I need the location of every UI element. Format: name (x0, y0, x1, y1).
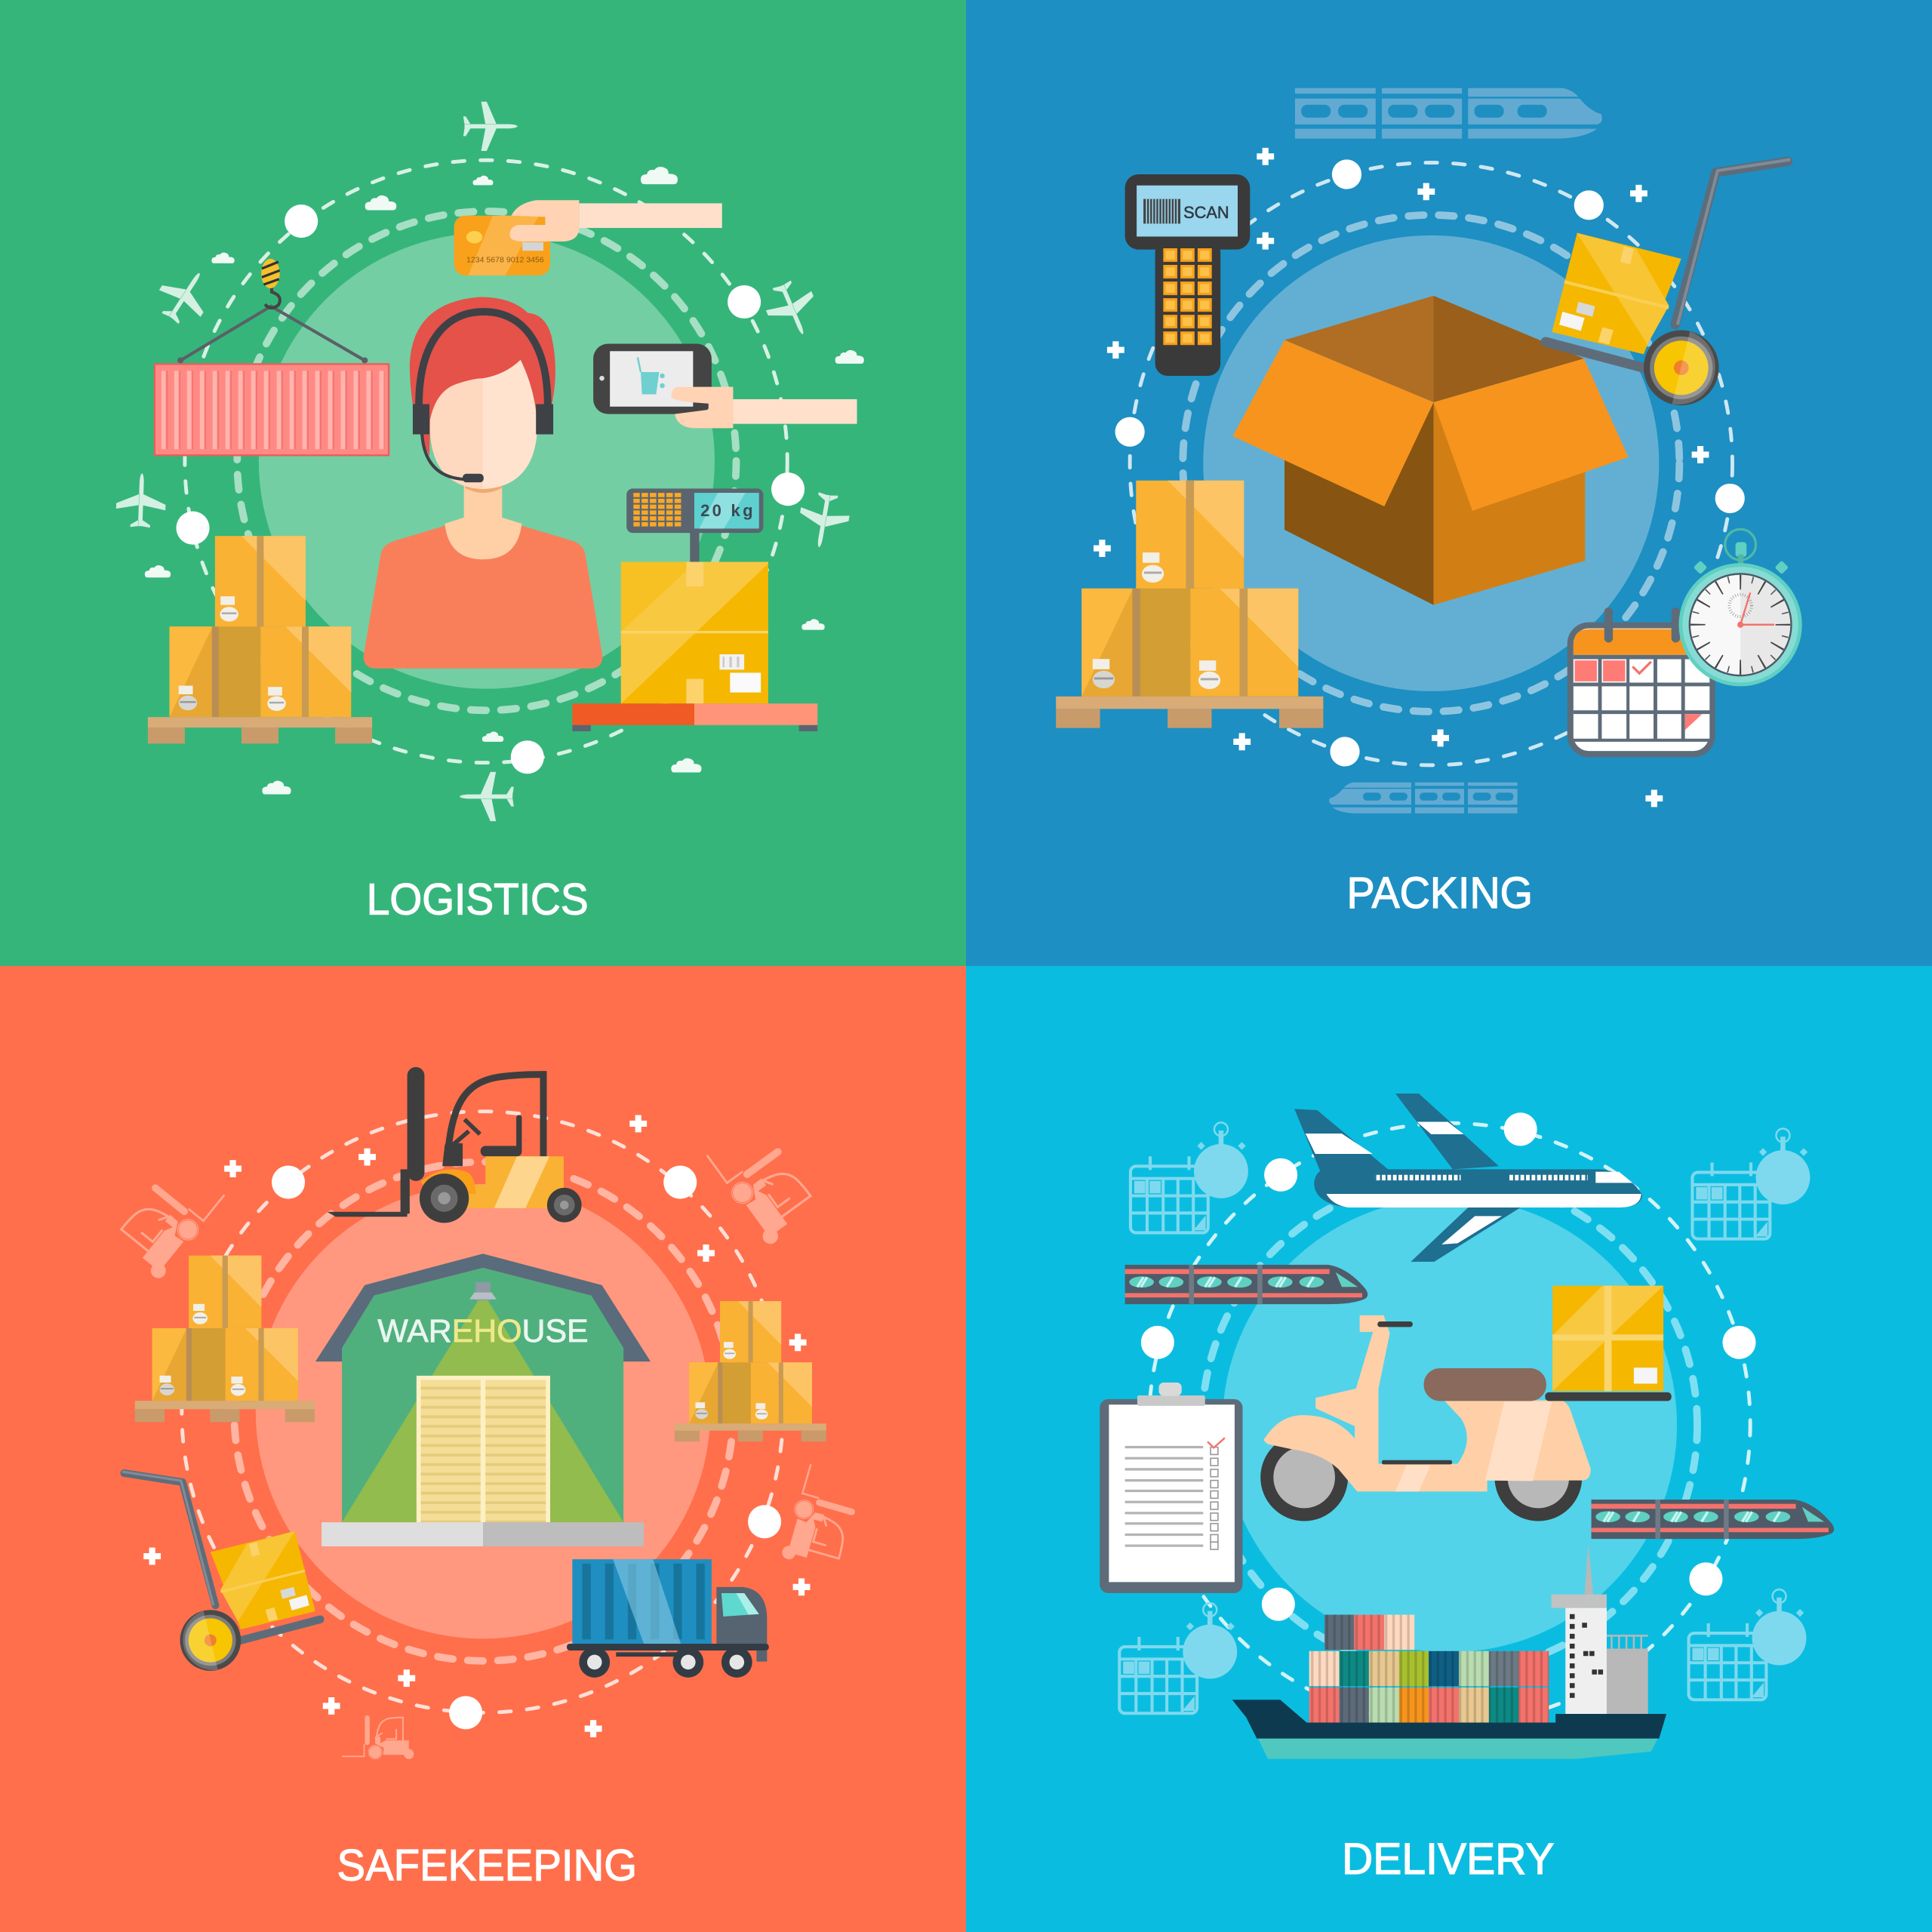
agent with headset (364, 297, 602, 669)
panel: delivery (966, 966, 1932, 1932)
central disc and orbit rings (1149, 1123, 1750, 1724)
title: delivery: DELIVERY (1342, 1835, 1555, 1884)
shipping container on crane hook (155, 259, 389, 455)
parcels on pallet right (675, 1301, 826, 1441)
forklift (327, 1067, 582, 1223)
parcels on pallet (148, 536, 372, 743)
title: safekeeping: SAFEKEEPING (337, 1841, 637, 1890)
stopwatch (1678, 529, 1802, 686)
central disc and orbit rings (182, 1112, 783, 1712)
parcels on pallet (1056, 481, 1323, 728)
calendar (1571, 608, 1712, 754)
airplane (1294, 1094, 1642, 1262)
hand truck with parcel (122, 1472, 320, 1671)
parcel scale 20 kg: 20 kg (700, 501, 753, 520)
panel: safekeeping (0, 966, 966, 1932)
credit card with hand (454, 200, 722, 275)
route nodes (1115, 159, 1745, 767)
smartphone with hand (593, 344, 857, 428)
clouds (145, 167, 864, 795)
scooter with parcel (1260, 1286, 1672, 1521)
title: packing: PACKING (1346, 869, 1533, 918)
panel: logistics (0, 0, 966, 966)
hand truck with parcel (1546, 159, 1790, 405)
route nodes (1141, 1112, 1756, 1621)
container truck (567, 1559, 769, 1678)
faint train top (1295, 88, 1602, 139)
barcode scanner: SCAN (1183, 203, 1229, 222)
credit card with hand: 1234 5678 9012 3456 (466, 257, 544, 265)
plus marks (1094, 148, 1709, 807)
route nodes (176, 205, 804, 774)
barcode scanner (1125, 174, 1250, 376)
warehouse: WAREHOUSE (377, 1313, 589, 1349)
parcels on pallet left (135, 1256, 315, 1422)
train right (1592, 1500, 1834, 1539)
parcel scale 20 kg (572, 488, 817, 731)
panel: packing (966, 0, 1932, 966)
container ship (1232, 1544, 1666, 1759)
route nodes (272, 1165, 781, 1729)
planes (115, 102, 853, 821)
title: logistics: LOGISTICS (367, 875, 589, 924)
plus marks (143, 1115, 810, 1737)
train left (1125, 1265, 1367, 1304)
central disc and orbit rings (1130, 163, 1733, 765)
faint forklifts (109, 1119, 864, 1759)
faint train bottom (1329, 783, 1518, 814)
open cardboard box (1232, 296, 1629, 605)
warehouse (315, 1254, 651, 1546)
faint calendar and stopwatch icons (1119, 1122, 1810, 1713)
clipboard checklist (1100, 1383, 1243, 1593)
central disc and orbit rings (185, 160, 787, 763)
